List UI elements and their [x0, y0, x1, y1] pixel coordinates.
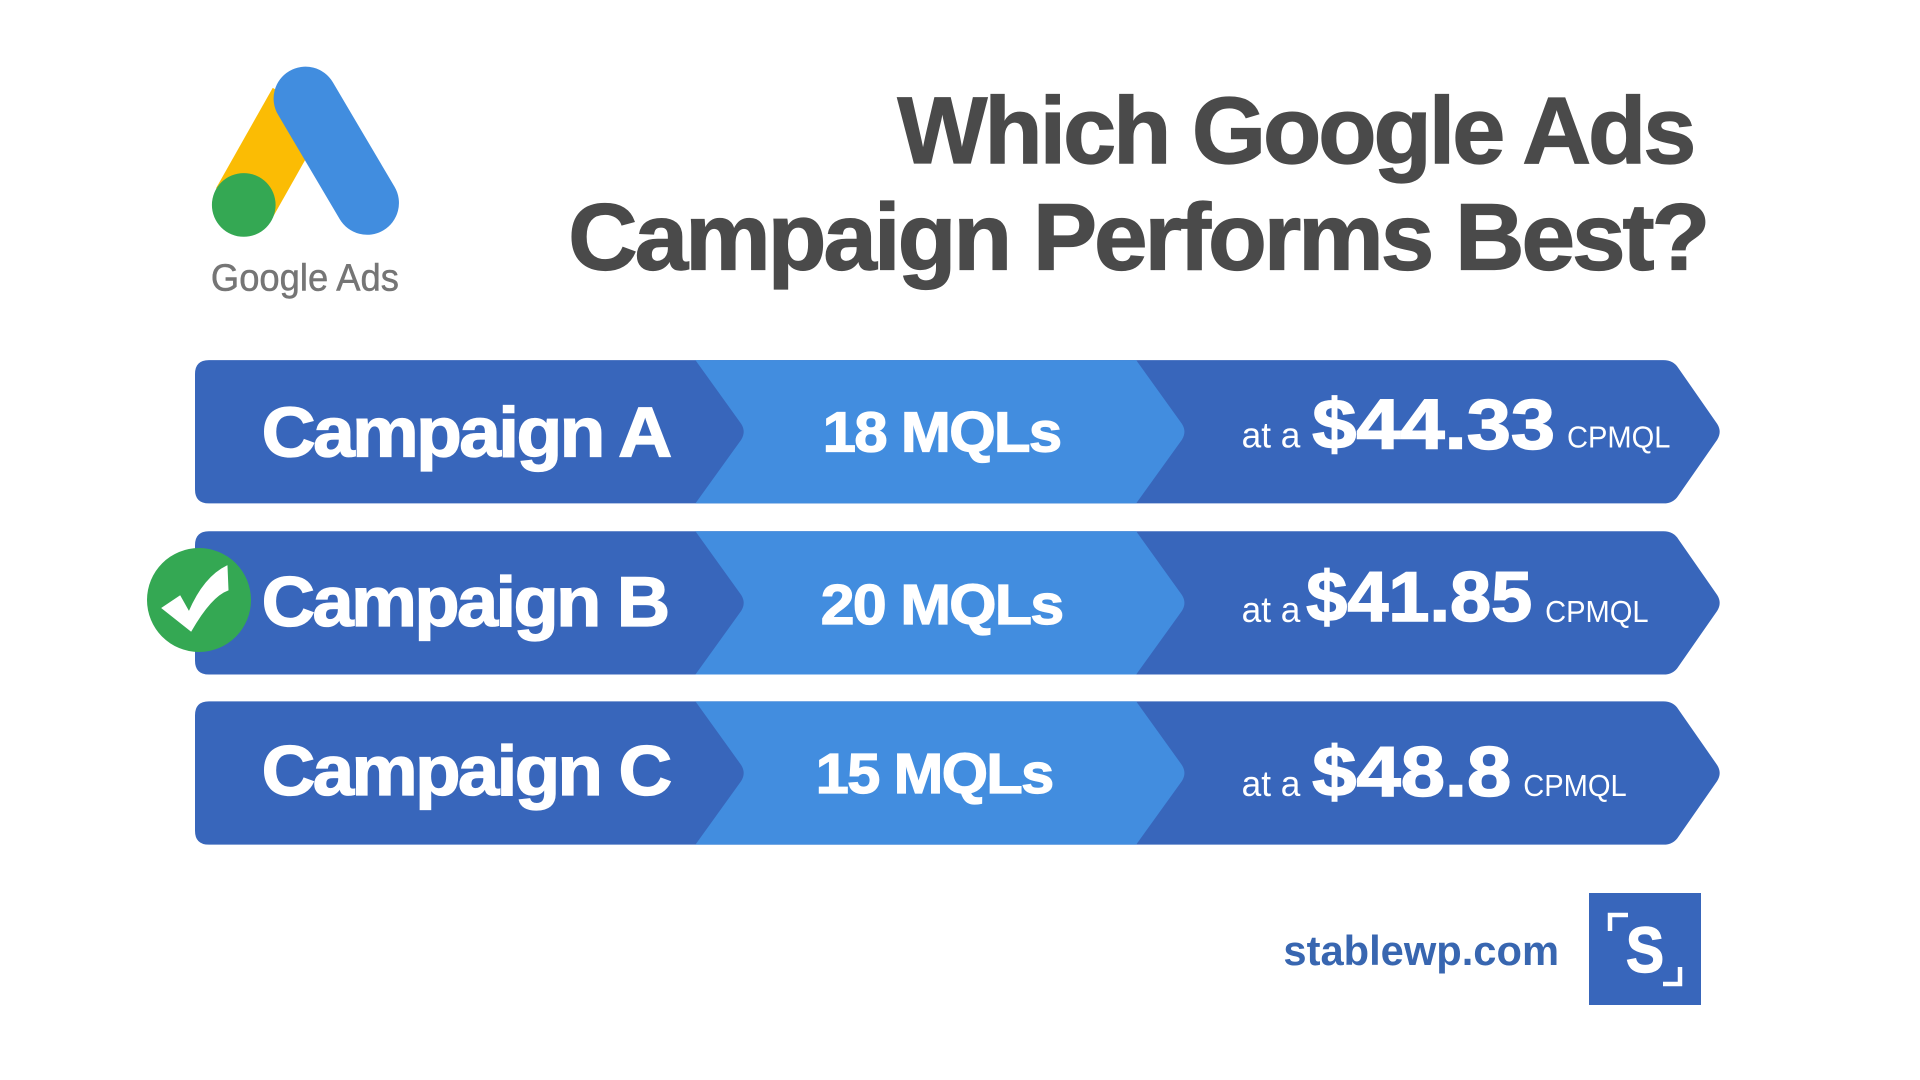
logo: StableWP: S — [1626, 914, 1664, 986]
middle chevron — [695, 531, 1184, 675]
row: Campaign A — [195, 360, 1720, 503]
title: Which Google Ads — [897, 78, 1693, 184]
arrow bar — [195, 701, 1720, 845]
MQL count: 20 MQLs — [821, 574, 1063, 637]
cost: CPMQL — [1523, 768, 1627, 803]
logo wordmark: Google Ads — [211, 258, 399, 300]
middle chevron — [695, 360, 1184, 503]
arrow bar — [195, 531, 1720, 675]
title: Campaign Performs Best? — [568, 185, 1707, 291]
campaign name: Campaign C — [262, 731, 671, 810]
row: Campaign C — [195, 701, 1720, 845]
campaign name: Campaign A — [262, 393, 671, 472]
cost: $41.85 — [1306, 557, 1532, 636]
logo icon: green dot — [212, 173, 276, 237]
arrow bar — [195, 360, 1720, 503]
footer: site name: stablewp.com — [1283, 927, 1559, 974]
cost: $48.8 — [1312, 732, 1511, 811]
row: Campaign B — [195, 531, 1720, 675]
cost — [1242, 732, 1627, 811]
MQL count: 18 MQLs — [823, 402, 1061, 465]
campaign name: Campaign B — [262, 562, 668, 641]
cost — [1242, 385, 1670, 464]
logo icon: yellow bar — [244, 103, 300, 204]
logo: Google Ads — [211, 98, 399, 300]
MQL count: 15 MQLs — [816, 743, 1053, 806]
cost — [1242, 557, 1649, 636]
cost: CPMQL — [1567, 420, 1670, 455]
cost: CPMQL — [1545, 594, 1649, 629]
logo: StableWP — [1589, 893, 1701, 1005]
cost: at a — [1242, 590, 1300, 630]
middle chevron — [695, 701, 1184, 845]
cost: at a — [1242, 416, 1300, 456]
icon: green check badge — [147, 548, 251, 652]
cost: $44.33 — [1312, 385, 1555, 464]
title — [568, 78, 1707, 291]
logo icon: blue bar — [305, 98, 367, 203]
cost: at a — [1242, 764, 1300, 804]
